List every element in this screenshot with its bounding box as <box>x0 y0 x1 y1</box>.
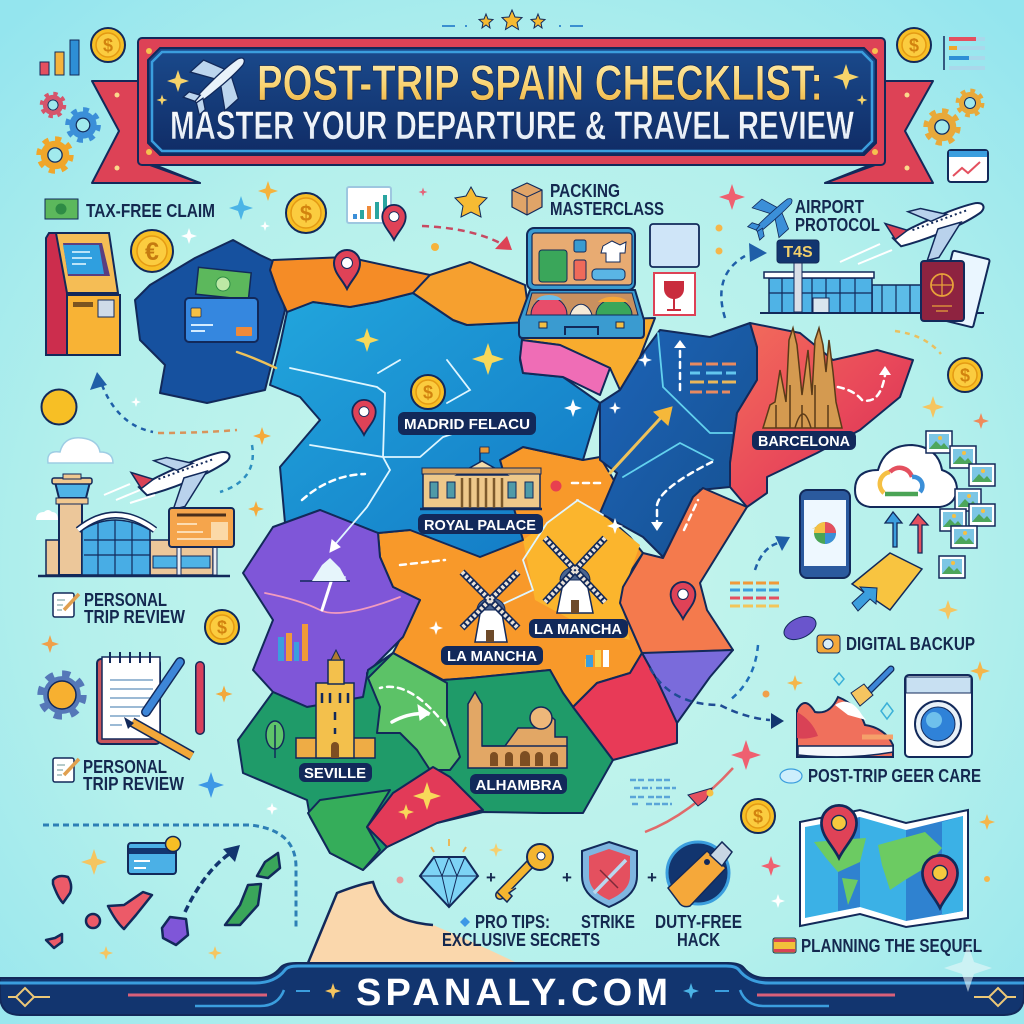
landmark: Barcelona Sagrada Familia <box>752 328 856 450</box>
icon: cloud <box>855 445 957 507</box>
landmark: windmill left <box>441 572 543 665</box>
banner ribbon tails <box>92 81 933 183</box>
region: Andalusia <box>238 653 613 870</box>
plus 3: + <box>647 868 657 887</box>
heading: post-trip gear care: POST-TRIP GEER CARE <box>808 766 981 786</box>
icon: washing machine <box>905 675 972 757</box>
checker bubble <box>650 224 699 267</box>
region: Aragon <box>600 323 757 557</box>
region: Navarra <box>520 318 655 390</box>
region: Valencia <box>620 488 747 653</box>
pro tips captions: STRIKE <box>581 912 635 932</box>
icon: shoe with brush <box>797 669 893 757</box>
plus 2: + <box>562 868 572 887</box>
corner icons right <box>897 28 988 182</box>
heading: personal trip review 2 <box>53 757 184 794</box>
north Africa sand <box>308 882 517 963</box>
region: Murcia <box>573 653 677 760</box>
heading: digital backup <box>780 612 975 654</box>
coin near bottom <box>741 799 775 833</box>
upload arrows <box>885 512 902 547</box>
icon: folded map <box>800 805 968 927</box>
landmark: Royal Palace <box>418 447 543 534</box>
right: digital backup icons <box>800 396 995 620</box>
pale sparkle <box>944 944 992 992</box>
region: Castilla <box>270 293 600 557</box>
landmark: Alhambra <box>468 692 567 794</box>
data lines near Valencia <box>730 583 780 606</box>
landmark: windmill left: LA MANCHA <box>447 648 537 665</box>
dashed line by Catalonia <box>895 331 941 354</box>
dashed arrow to terminal <box>721 243 767 318</box>
region: Extremadura <box>243 510 420 707</box>
icon: plane top right <box>884 194 993 268</box>
map of Spain <box>135 240 913 870</box>
landmark: Barcelona Sagrada Familia: BARCELONA <box>758 433 850 450</box>
bar chart: La Mancha <box>585 650 609 667</box>
scattered sparkles <box>716 224 995 882</box>
landmark: Seville Giralda: SEVILLE <box>304 765 366 782</box>
region: Andalusia south red <box>367 767 483 847</box>
pro tips captions: PRO TIPS: <box>475 912 550 932</box>
heading: personal trip review 2: TRIP REVIEW <box>83 774 184 794</box>
arrows on map <box>237 352 672 722</box>
icon: tree <box>266 721 284 758</box>
euro coin: € <box>145 238 159 266</box>
icon: passport and boarding pass <box>921 250 990 328</box>
star blue <box>198 772 224 798</box>
fragile sign <box>654 273 695 315</box>
landmark: windmill right: LA MANCHA <box>534 621 622 638</box>
region: Castilla-La Mancha <box>378 447 643 707</box>
pro tips icons row <box>396 839 732 907</box>
plus 1: + <box>486 868 496 887</box>
coin <box>205 610 239 644</box>
sparkle red top <box>719 184 745 210</box>
pins, coins and sparkles on map <box>334 250 695 820</box>
Canary islands and dashed route <box>43 825 296 960</box>
heading: personal trip review 1 <box>53 590 185 627</box>
icon: tax refund kiosk <box>46 233 120 355</box>
region: Andalusia light green <box>368 653 460 770</box>
dashed arrow to phone <box>755 536 790 570</box>
icon: shield <box>582 842 637 907</box>
sparkle orange <box>216 686 232 702</box>
top stars <box>442 10 583 30</box>
euro coin <box>131 230 173 272</box>
pro tips captions: HACK <box>677 930 720 950</box>
star red small <box>761 856 781 876</box>
region: La Mancha east <box>523 500 640 640</box>
heading: personal trip review 1: TRIP REVIEW <box>84 607 185 627</box>
region: Alicante <box>642 650 733 723</box>
icon: banner plane <box>174 40 261 125</box>
icon: diamond <box>420 857 478 907</box>
pro tips captions <box>442 912 742 950</box>
pro tips captions: DUTY-FREE <box>655 912 742 932</box>
floating coin and chart card: $ <box>300 201 312 226</box>
heading: personal trip review 2: PERSONAL <box>83 757 167 777</box>
region: Basque coast <box>413 262 530 325</box>
heading: airport protocol <box>740 184 880 248</box>
heading: packing masterclass: PACKING <box>550 181 620 201</box>
dashed arrow to shoe <box>650 645 784 729</box>
heading: packing masterclass: MASTERCLASS <box>550 199 664 219</box>
heading: packing masterclass <box>512 181 664 219</box>
heading: digital backup: DIGITAL BACKUP <box>846 634 975 654</box>
icon: USB tag <box>667 842 732 907</box>
title banner <box>138 38 885 165</box>
landmark: windmill right <box>529 538 628 638</box>
region: Galicia <box>135 240 285 403</box>
icon: open suitcase <box>519 224 699 338</box>
gear and notepad <box>41 652 200 756</box>
footer band <box>0 963 1024 1015</box>
coast outline <box>308 882 433 963</box>
rocket streak <box>630 768 733 832</box>
region route lines <box>265 333 891 725</box>
folder <box>852 553 922 610</box>
banner sparkles <box>156 64 868 106</box>
tax-free cash and card on map <box>185 267 258 342</box>
landmark: Royal Palace: ROYAL PALACE <box>424 517 536 534</box>
icon: airport terminal T4S <box>760 240 984 313</box>
heading: tax-free claim <box>45 199 215 221</box>
corner icons left <box>39 28 125 171</box>
region: Andalusia south green <box>308 790 390 870</box>
region: Catalonia <box>730 323 913 507</box>
title line 1: POST-TRIP SPAIN CHECKLIST: <box>257 55 823 111</box>
floating left decoration <box>42 372 271 517</box>
region: Asturias <box>270 257 430 312</box>
label: Madrid: MADRID FELACU <box>404 416 530 433</box>
landmark: Alhambra: ALHAMBRA <box>476 777 563 794</box>
sparkle left <box>41 635 59 653</box>
star red <box>731 740 761 770</box>
heading: tax-free claim: TAX-FREE CLAIM <box>86 201 215 221</box>
heading: airport protocol: PROTOCOL <box>795 215 880 235</box>
heading: airport protocol: AIRPORT <box>795 197 864 217</box>
label: Madrid <box>398 412 536 435</box>
heading: planning the sequel: PLANNING THE SEQUEL <box>801 936 982 956</box>
bar chart: Aragon data <box>690 364 736 392</box>
pro tips captions: EXCLUSIVE SECRETS <box>442 930 600 950</box>
icon: airport building left <box>38 474 234 576</box>
icon: key <box>497 844 553 902</box>
icon: airport terminal T4S: T4S <box>783 244 813 261</box>
floating coin and chart card <box>181 181 512 251</box>
region: La Rioja <box>520 340 610 395</box>
icon: cloud and plane left <box>36 438 239 520</box>
coin by Catalonia <box>948 358 982 392</box>
heading: personal trip review 1: PERSONAL <box>84 590 167 610</box>
icon: phone <box>800 490 850 578</box>
footer website text: SPANALY.COM <box>356 972 668 1014</box>
bar chart: Extremadura <box>278 558 350 661</box>
landmark: Seville Giralda <box>266 650 375 782</box>
white sparkles <box>131 397 785 908</box>
photo stack <box>926 431 952 453</box>
